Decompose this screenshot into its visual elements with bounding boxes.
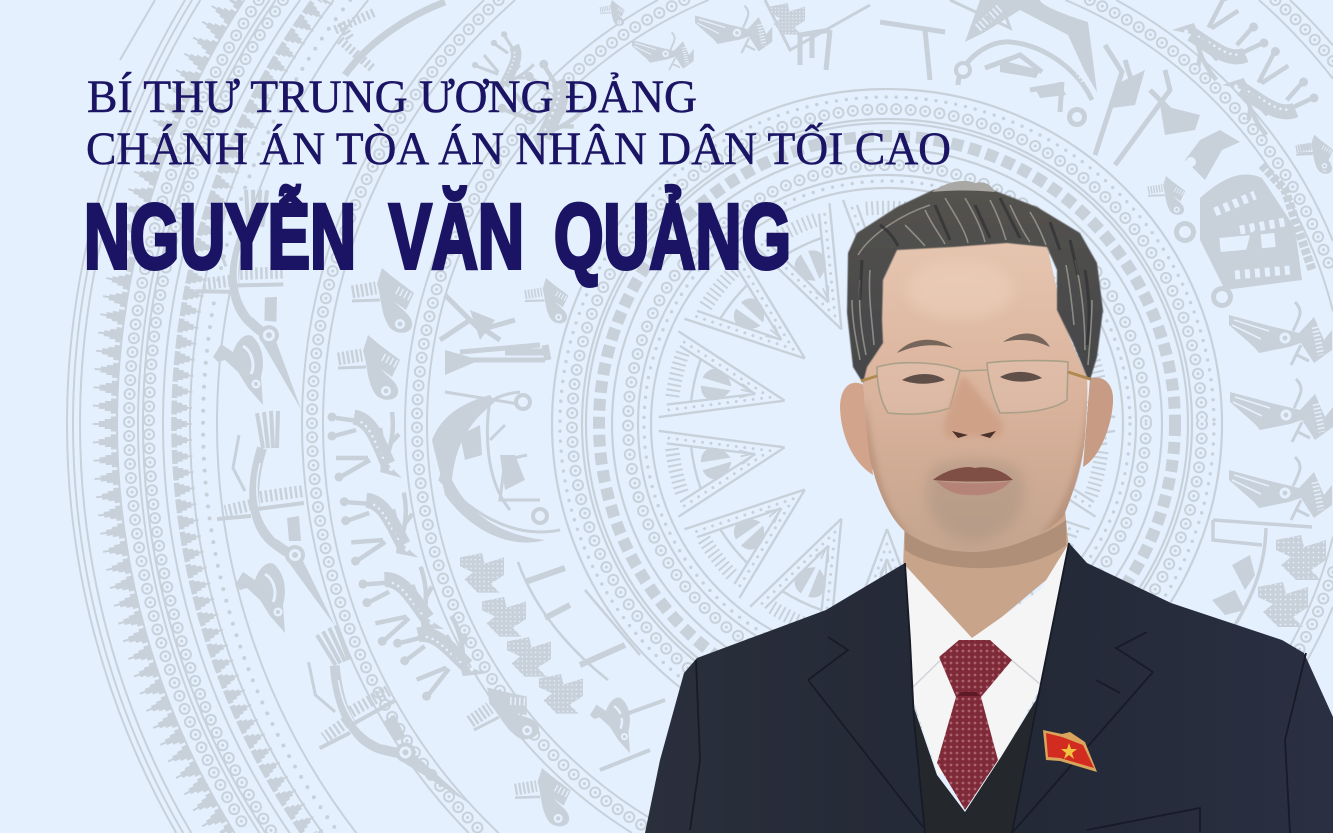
heading: position titles: BÍ THƯ TRUNG ƯƠNG ĐẢNG [87,71,697,123]
drum boat and human figures [432,278,665,770]
drum birds band [120,0,469,833]
drum central star [659,200,1115,648]
hair dark strands [860,198,1089,345]
jacket lapels [690,543,1306,833]
hair highlights [852,198,1092,365]
gray hair tuft [932,181,995,192]
shirt collar edges [912,642,1040,688]
lower lip [936,481,1011,495]
drum top boat [950,0,1200,165]
glasses [877,361,1068,414]
face [863,235,1087,552]
suit jacket [645,543,1333,833]
right ear [1083,377,1113,467]
drum sawtooth bands [96,0,332,833]
face shading [858,260,1095,542]
drum top figures [600,0,945,80]
tie [937,640,1012,810]
heading: position titles [86,71,951,175]
cheek shading [866,407,1087,533]
beard shadow [927,459,1024,542]
glasses temples [861,372,1090,381]
eyebrows [897,334,1050,353]
tie knot shading [958,692,980,696]
heading: position titles: CHÁNH ÁN TÒA ÁN NHÂN DÂN TỐI CAO [86,122,951,175]
shirt [903,543,1069,775]
heading: name [84,184,791,288]
eyes [902,372,1042,384]
neck [903,500,1070,642]
drum deer band [328,0,1333,826]
left ear [840,383,873,475]
drum right figures [1148,130,1333,627]
heading: name: QUẢNG [554,185,791,288]
heading: name: NGUYỄN [84,184,356,288]
drum inner rings [552,89,1222,759]
icon: flag pin [1043,730,1097,772]
forehead highlight [912,269,1008,316]
vest [913,700,1036,833]
nose [944,375,1003,438]
neck shadow under chin [905,520,1066,568]
mouth [933,467,1013,482]
nostrils [952,431,996,438]
portrait [645,181,1333,833]
hair [847,183,1103,383]
heading: name: VĂN [389,186,524,288]
